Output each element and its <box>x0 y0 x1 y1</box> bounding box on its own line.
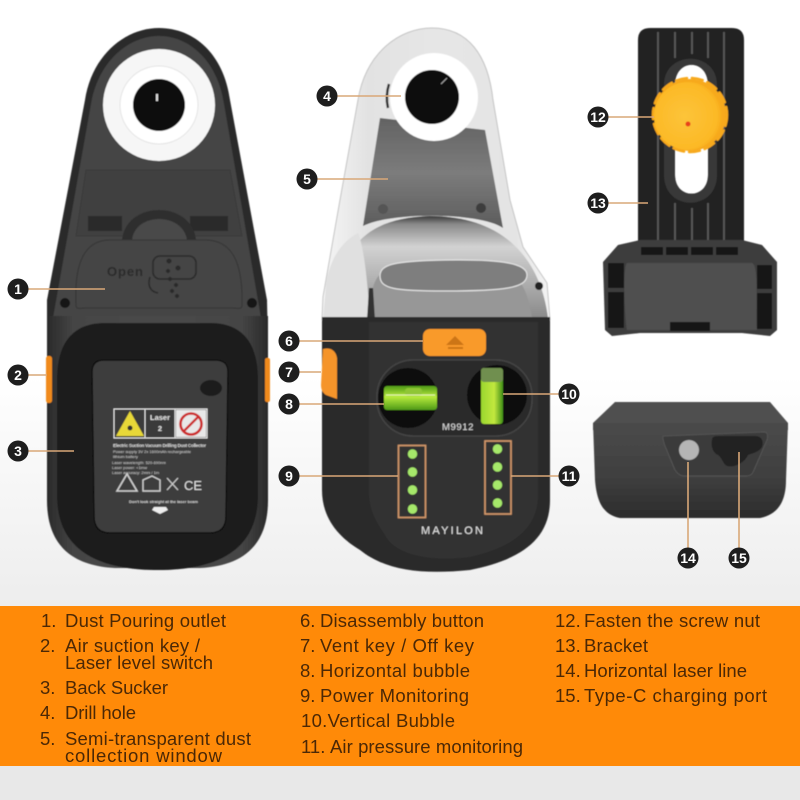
badge 11 <box>558 466 580 486</box>
label plate text: CE <box>184 478 202 493</box>
screw knob <box>653 78 727 152</box>
legend column 1: 3. <box>40 677 55 698</box>
legend column 2: Horizontal bubble <box>320 660 470 681</box>
badge 9: 9 <box>285 468 293 484</box>
page background <box>0 0 800 606</box>
badge 2 <box>8 364 28 386</box>
badge 7 <box>278 362 300 382</box>
bracket cradle <box>603 240 777 336</box>
legend column 2: Air pressure monitoring <box>330 736 523 757</box>
footer strip <box>0 766 800 800</box>
drill hole ring <box>387 53 478 141</box>
back view lower body <box>47 316 268 568</box>
back view shell face <box>53 36 261 318</box>
open icon <box>149 256 196 298</box>
clear lower dome <box>323 216 548 320</box>
legend column 3: 13. <box>555 635 581 656</box>
badge 14 <box>678 548 698 568</box>
label plate text: Laser wavelength: 520-690nm <box>112 460 166 465</box>
label plate <box>92 360 228 533</box>
badge 9 <box>278 466 300 486</box>
badge 3 <box>8 440 28 462</box>
badge 5 <box>296 168 318 190</box>
vent key <box>321 348 337 399</box>
legend column 1: 1. <box>41 610 56 631</box>
badge 12: 12 <box>590 109 606 125</box>
legend column 1: collection window <box>65 745 223 766</box>
end view top edge <box>593 402 788 430</box>
legend column 2: 11. <box>301 736 325 757</box>
legend column 2: 8. <box>300 660 315 681</box>
legend column 1: Back Sucker <box>65 677 168 698</box>
badge 6: 6 <box>285 333 293 349</box>
badge 5: 5 <box>303 171 311 187</box>
badge 15 <box>728 548 750 568</box>
power monitoring LEDs <box>398 446 426 518</box>
legend column 1: Semi-transparent dust <box>65 728 251 749</box>
orange legend band <box>0 606 800 766</box>
legend column 3: 12. <box>555 610 581 631</box>
label plate text: Electric Suction Vacuum Drilling Dust Collector <box>113 443 206 448</box>
badge 8 <box>278 394 300 414</box>
legend column 1: Drill hole <box>65 702 136 723</box>
badge 8: 8 <box>285 396 293 412</box>
front body <box>322 317 550 572</box>
label plate text: Laser power: <1mw <box>112 465 147 470</box>
bubble level recess <box>377 360 532 436</box>
badge 1 <box>8 278 28 300</box>
label plate text <box>112 443 206 514</box>
left orange key <box>46 356 52 403</box>
legend column 3: Fasten the screw nut <box>584 610 760 631</box>
laser and charging port panel <box>663 432 768 476</box>
legend column 2 <box>300 610 523 757</box>
end view body <box>593 423 788 518</box>
model number: M9912 <box>442 422 474 433</box>
legend column 1: Air suction key / <box>65 635 201 656</box>
legend column 2: Disassembly button <box>320 610 484 631</box>
legend column 3: Type-C charging port <box>584 685 767 706</box>
legend column 1: Laser level switch <box>65 652 213 673</box>
label plate text: lithium battery <box>113 454 138 459</box>
badge 11: 11 <box>562 468 577 484</box>
vertical bubble vial <box>481 368 503 424</box>
badge 2: 2 <box>14 367 22 383</box>
legend column 2: 9. <box>300 685 315 706</box>
legend column 1: 2. <box>40 635 55 656</box>
horizontal bubble vial <box>384 386 437 410</box>
legend column 2: Power Monitoring <box>320 685 469 706</box>
legend column 1: 4. <box>40 702 55 723</box>
badge 10 <box>558 384 580 404</box>
badge 15: 15 <box>731 550 747 566</box>
legend column 2: 7. <box>300 635 315 656</box>
disassembly button <box>423 329 486 356</box>
badge 4: 4 <box>323 88 331 104</box>
badge 7: 7 <box>285 364 293 380</box>
legend column 3: Bracket <box>584 635 648 656</box>
legend column 3 <box>555 610 767 706</box>
laser warning labels <box>114 409 207 438</box>
legend column 2: Vent key / Off key <box>320 635 475 656</box>
right orange key <box>265 358 270 402</box>
Type-C port cover <box>712 436 763 466</box>
badge 13: 13 <box>590 195 606 211</box>
air pressure LEDs <box>485 441 511 514</box>
front body centre panel <box>369 322 538 559</box>
callout badges <box>8 86 750 568</box>
back view upper shell <box>47 28 268 345</box>
laser window <box>679 440 699 460</box>
bracket <box>603 28 777 336</box>
badge 12 <box>588 106 608 128</box>
legend column 2: 6. <box>300 610 315 631</box>
back sucker foam pad <box>57 323 258 570</box>
device: bottom end view <box>593 402 788 518</box>
badge 14: 14 <box>680 550 696 566</box>
label plate text: Power supply 3V 2x 1600mAh rechargeable <box>113 449 192 454</box>
legend column 2: 10.Vertical Bubble <box>301 710 455 731</box>
legend column 1: 5. <box>40 728 55 749</box>
legend column 3: Horizontal laser line <box>584 660 747 681</box>
brand name: MAYILON <box>421 525 483 537</box>
badge 10: 10 <box>561 386 577 402</box>
legend column 1: Dust Pouring outlet <box>65 610 226 631</box>
callout leader lines <box>27 96 739 549</box>
badge 1: 1 <box>14 281 22 297</box>
legend column 1 <box>40 610 251 766</box>
dust outlet door <box>60 170 257 308</box>
laser warning labels: 2 <box>158 424 162 433</box>
legend column 3: 15. <box>555 685 581 706</box>
legend column 3: 14. <box>555 660 581 681</box>
white drill ring <box>103 49 215 161</box>
laser warning labels: Laser <box>150 413 170 422</box>
badge 13 <box>588 192 608 214</box>
badge 3: 3 <box>14 443 22 459</box>
open label: Open <box>107 264 143 279</box>
label plate text: Don't look straight at the laser beam <box>129 499 198 504</box>
translucent dust window shell <box>322 28 550 320</box>
device: back view <box>46 28 270 570</box>
grey window interior <box>363 118 503 228</box>
device: front view <box>321 28 550 572</box>
label plate text: Laser accuracy: 2mm / 1m <box>112 470 160 475</box>
bracket plate <box>638 28 744 245</box>
badge 4 <box>316 86 338 106</box>
badge 6 <box>278 330 300 352</box>
